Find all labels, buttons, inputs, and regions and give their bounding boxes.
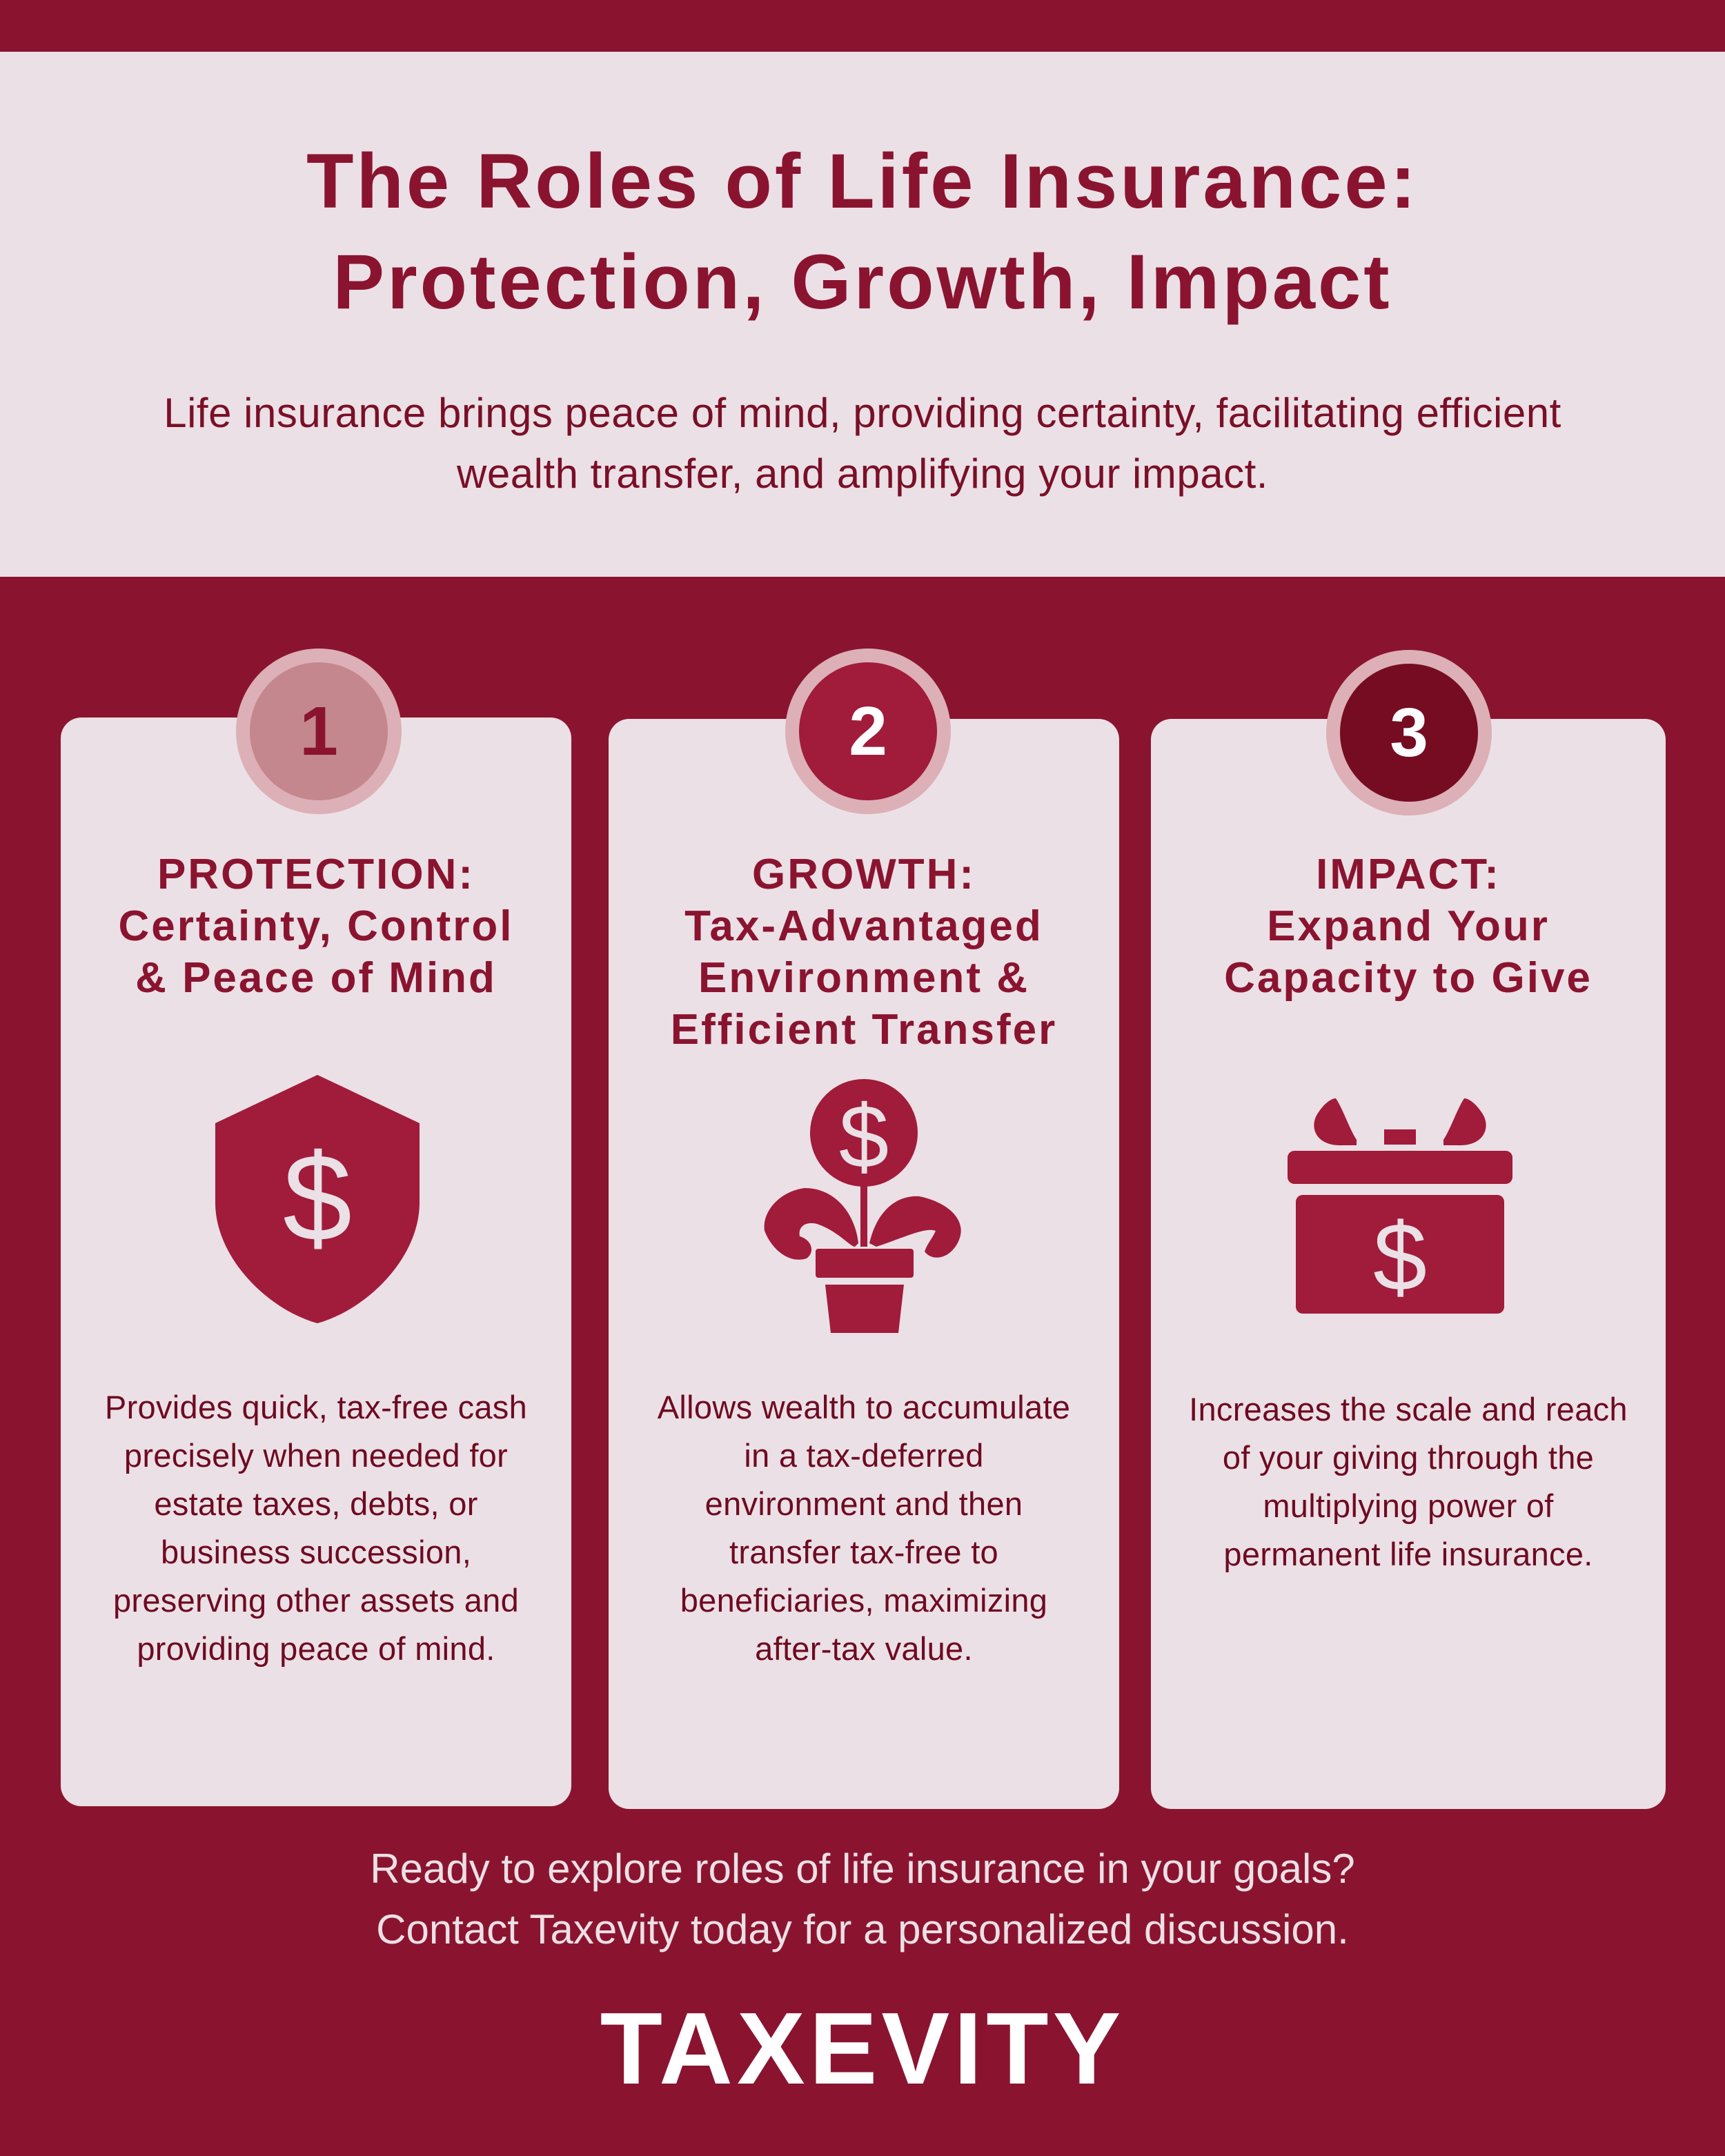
footer call to action: Ready to explore roles of life insurance in your goals? bbox=[370, 1846, 1355, 1892]
heading: growth bbox=[671, 851, 1057, 1054]
body text: impact: of your giving through the bbox=[1223, 1439, 1594, 1476]
header panel bbox=[0, 52, 1725, 577]
badge 3: 3 bbox=[1390, 694, 1428, 771]
body text: growth: after-tax value. bbox=[755, 1630, 973, 1667]
body text: protection: preserving other assets and bbox=[113, 1582, 519, 1619]
body text: protection: precisely when needed for bbox=[124, 1437, 508, 1474]
heading: impact bbox=[1224, 851, 1593, 1002]
panel: growth bbox=[609, 719, 1119, 1809]
heading: growth: Efficient Transfer bbox=[671, 1006, 1057, 1054]
badge 3 bbox=[1326, 650, 1492, 815]
body text: protection: estate taxes, debts, or bbox=[154, 1485, 478, 1522]
body text: growth bbox=[657, 1389, 1070, 1667]
subtitle bbox=[164, 390, 1561, 497]
badge 2: 2 bbox=[849, 693, 887, 770]
footer call to action bbox=[370, 1846, 1355, 1952]
title bbox=[306, 138, 1419, 325]
heading: protection: & Peace of Mind bbox=[135, 954, 497, 1002]
icon: shield dollar: $ bbox=[283, 1129, 352, 1267]
body text: impact: Increases the scale and reach bbox=[1189, 1391, 1628, 1427]
heading: impact: Expand Your bbox=[1267, 902, 1550, 950]
badge 2 bbox=[785, 649, 951, 814]
body text: impact: multiplying power of bbox=[1263, 1487, 1554, 1524]
body text: growth: beneficiaries, maximizing bbox=[680, 1582, 1047, 1619]
body text: protection: business succession, bbox=[161, 1534, 471, 1570]
heading: growth: GROWTH: bbox=[752, 851, 976, 898]
footer call to action: Contact Taxevity today for a personalized discussion. bbox=[376, 1906, 1349, 1952]
heading: protection: Certainty, Control bbox=[119, 902, 513, 950]
icon: gift dollar bbox=[1288, 1098, 1512, 1314]
body text: protection: Provides quick, tax-free cash bbox=[105, 1389, 527, 1425]
icon: money plant: $ bbox=[839, 1086, 889, 1187]
title: Protection, Growth, Impact bbox=[333, 239, 1392, 325]
badge 1: 1 bbox=[299, 693, 338, 770]
icon: gift dollar: $ bbox=[1373, 1203, 1427, 1311]
body text: growth: in a tax-deferred bbox=[744, 1437, 984, 1474]
body text: growth: environment and then bbox=[705, 1485, 1023, 1522]
body text: growth: Allows wealth to accumulate bbox=[658, 1389, 1070, 1425]
body text: growth: transfer tax-free to bbox=[729, 1534, 998, 1570]
logo: TAXEVITY bbox=[600, 1992, 1125, 2106]
body text: impact bbox=[1189, 1391, 1628, 1572]
heading: impact: IMPACT: bbox=[1316, 851, 1501, 898]
body text: protection bbox=[105, 1389, 527, 1667]
title: The Roles of Life Insurance: bbox=[306, 138, 1419, 224]
heading: growth: Tax-Advantaged bbox=[684, 902, 1043, 950]
heading: growth: Environment & bbox=[698, 954, 1029, 1002]
heading: protection bbox=[119, 851, 513, 1002]
body text: impact: permanent life insurance. bbox=[1223, 1536, 1593, 1572]
badge 1 bbox=[236, 649, 402, 814]
panel: impact bbox=[1151, 719, 1666, 1809]
body text: protection: providing peace of mind. bbox=[137, 1630, 495, 1667]
heading: impact: Capacity to Give bbox=[1224, 954, 1593, 1002]
icon: shield dollar bbox=[215, 1075, 420, 1323]
subtitle: Life insurance brings peace of mind, providing certainty, facilitating efficient bbox=[164, 390, 1561, 436]
panel: protection bbox=[61, 718, 571, 1806]
icon: money plant bbox=[765, 1079, 961, 1333]
subtitle: wealth transfer, and amplifying your impact. bbox=[457, 451, 1268, 497]
heading: protection: PROTECTION: bbox=[157, 851, 475, 898]
